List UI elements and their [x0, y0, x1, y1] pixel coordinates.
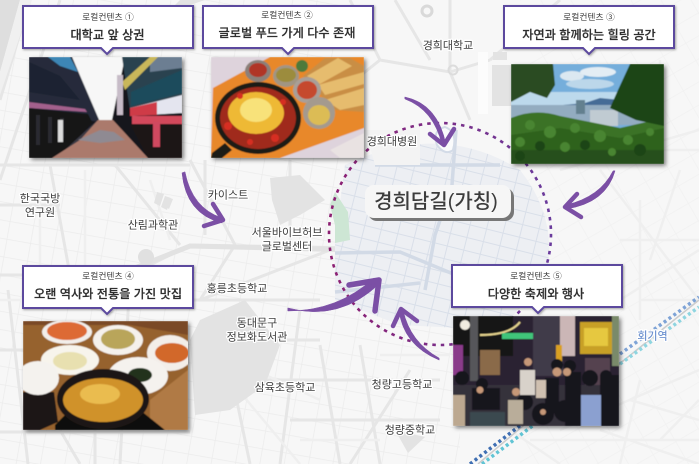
map labels: 경희대병원 [367, 135, 417, 148]
photo 4: Korean meal [17, 320, 193, 430]
map: gray blocks [138, 52, 512, 453]
callout 1: 로컬컨텐츠 ① [82, 12, 134, 22]
callout 1 [23, 6, 193, 54]
title pill: 경희담길(가칭) [374, 190, 498, 213]
photo 5: night street crowd [453, 316, 619, 426]
callout 4: 로컬컨텐츠 ④ [82, 271, 134, 281]
map labels: 연구원 [25, 206, 55, 219]
map labels: 한국국방 [20, 192, 60, 205]
callout 1: 대학교 앞 상권 [70, 27, 145, 42]
map: main blue streets [335, 130, 545, 305]
map labels: 산림과학관 [128, 218, 178, 232]
map: river band [0, 0, 20, 72]
map: green park [330, 192, 350, 243]
callout 4: 오랜 역사와 전통을 가진 맛집 [34, 287, 182, 301]
arrow: content 2 to district [405, 97, 454, 145]
map labels: 경희대학교 [423, 39, 473, 52]
map labels: 청량중학교 [385, 424, 435, 436]
arrow: content 3 to district [565, 171, 615, 217]
map labels: 서울바이브허브 [252, 226, 322, 239]
callout 3 [504, 6, 674, 54]
callout 2: 글로벌 푸드 가게 다수 존재 [219, 25, 355, 40]
callout 5: 다양한 축제와 행사 [488, 286, 584, 301]
arrow: content 4 to district [288, 278, 380, 312]
photo 3: forest and city view [511, 64, 664, 164]
map: blue street fabric of the district [335, 144, 549, 330]
map labels: 글로벌센터 [262, 240, 312, 253]
map labels: 정보화도서관 [227, 330, 287, 344]
subway line [478, 300, 699, 464]
callout 3: 로컬컨텐츠 ③ [563, 12, 615, 22]
title pill [365, 185, 514, 221]
dotted circle [329, 123, 551, 345]
callout 5: 로컬컨텐츠 ⑤ [510, 271, 562, 281]
map labels: 카이스트 [208, 188, 248, 202]
map labels: 회기역 [637, 330, 668, 342]
map labels: 홍릉초등학교 [207, 281, 267, 295]
photo 1: street [29, 57, 182, 158]
map labels: 청량고등학교 [372, 378, 432, 391]
map labels: 동대문구 [237, 316, 277, 330]
map labels [20, 39, 668, 436]
callout 2 [203, 6, 373, 54]
callout 2: 로컬컨텐츠 ② [261, 10, 313, 20]
photo 2: food [211, 57, 364, 158]
arrow: content 5 to district [393, 309, 439, 360]
callout 4 [23, 266, 193, 314]
map labels: 삼육초등학교 [255, 381, 315, 394]
callout 5 [452, 265, 622, 313]
arrow: content 1 to district [182, 172, 223, 226]
callout 3: 자연과 함께하는 힐링 공간 [522, 27, 656, 42]
